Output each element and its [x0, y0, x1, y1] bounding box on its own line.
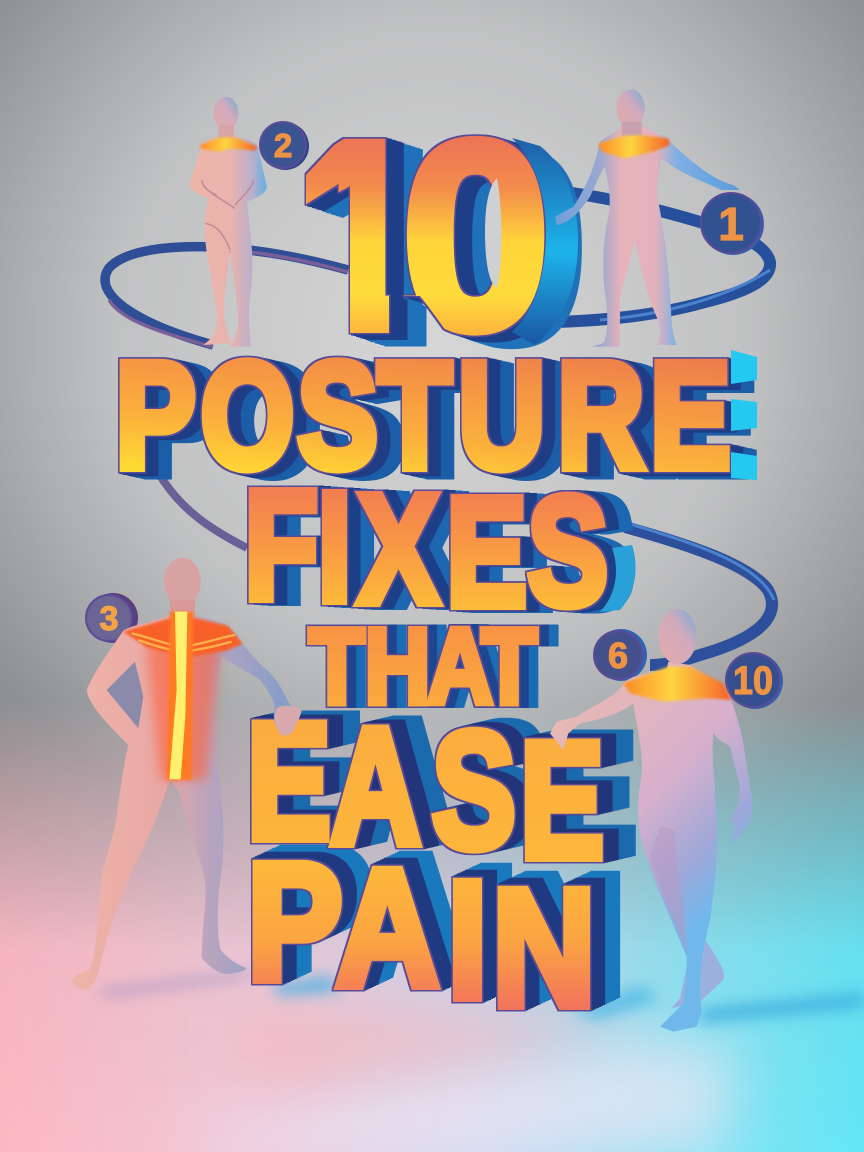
figure: top right: [555, 89, 740, 347]
figure: bottom right: [550, 609, 752, 1032]
title lettering: [118, 134, 757, 1012]
upper orbit tube: left: [105, 247, 348, 347]
lower orbit tube: left: [158, 472, 247, 548]
cyan side faces of final E: [731, 350, 757, 480]
title: EASE: EASE: [247, 689, 604, 893]
figure: bottom left: [72, 558, 302, 990]
figure: top left: [190, 97, 267, 347]
S side highlight: [600, 545, 636, 612]
badge 2: 2: [274, 127, 292, 164]
gap seen through the zero: [485, 178, 502, 288]
title: PAIN: PAIN: [247, 829, 595, 1040]
badge 10: 10: [733, 659, 773, 703]
title: FIXES: FIXES: [245, 460, 608, 638]
badge 6: [594, 629, 647, 681]
hand on the E: [275, 706, 302, 735]
badge 1: [701, 193, 764, 255]
title: 10: 10: [281, 85, 550, 385]
badge 1: 1: [718, 198, 744, 250]
zero side highlight: [512, 138, 578, 345]
lower orbit tube: right: [625, 524, 774, 665]
title: POSTURE: POSTURE: [116, 331, 730, 499]
badge 10: [726, 653, 783, 709]
upper orbit tube: right: [555, 193, 770, 322]
title: THAT: THAT: [309, 607, 537, 727]
badge 3: [86, 593, 138, 643]
badge 2: [260, 122, 309, 170]
badge 6: 6: [608, 635, 628, 676]
badge 3: 3: [100, 600, 118, 638]
